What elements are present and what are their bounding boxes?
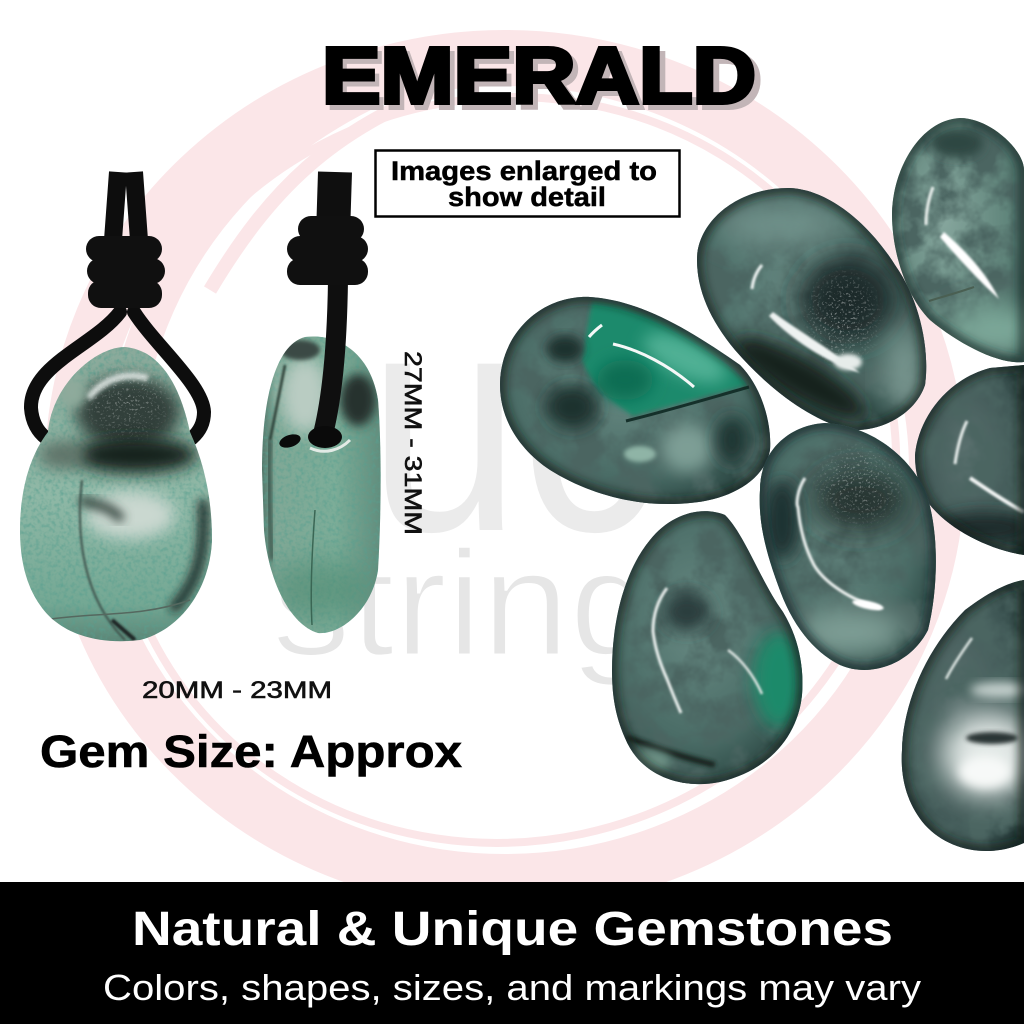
bottom banner — [0, 882, 1024, 1024]
gem 4 — [910, 360, 1024, 560]
side knot — [287, 216, 368, 285]
dimension: height: 27MM - 31MM — [399, 351, 426, 535]
watermark logo: uc — [368, 245, 658, 597]
gem 3 — [500, 296, 770, 504]
title: EMERALD — [326, 36, 762, 125]
banner headline: Natural & Unique Gemstones — [132, 903, 893, 956]
side chip — [278, 432, 302, 450]
gem 7 — [895, 575, 1024, 860]
pink brush ring — [44, 25, 966, 915]
callout: images enlarged: show detail — [448, 182, 606, 212]
front stone — [20, 347, 212, 642]
emerald flash — [753, 632, 805, 728]
callout: images enlarged: Images enlarged to — [391, 156, 657, 186]
emerald patch — [582, 301, 748, 416]
gem 6 — [612, 511, 802, 784]
front cord — [31, 172, 204, 438]
gem 2 — [697, 188, 926, 430]
gem size label: Gem Size: Approx — [40, 726, 462, 777]
pendant: side view — [258, 172, 386, 640]
dimension: width: 20MM - 23MM — [142, 677, 332, 704]
banner subline: Colors, shapes, sizes, and markings may vary — [103, 967, 921, 1008]
pendant: front view — [15, 172, 220, 650]
gem 5 — [755, 418, 940, 678]
side stone — [262, 336, 381, 634]
watermark logo — [272, 245, 658, 687]
callout: images enlarged — [376, 150, 680, 216]
watermark logo: string — [272, 519, 657, 687]
title: EMERALD — [322, 31, 756, 120]
side cord — [322, 172, 338, 438]
drill hole — [308, 426, 342, 448]
front knot — [86, 236, 165, 308]
gem 1 — [892, 118, 1024, 362]
